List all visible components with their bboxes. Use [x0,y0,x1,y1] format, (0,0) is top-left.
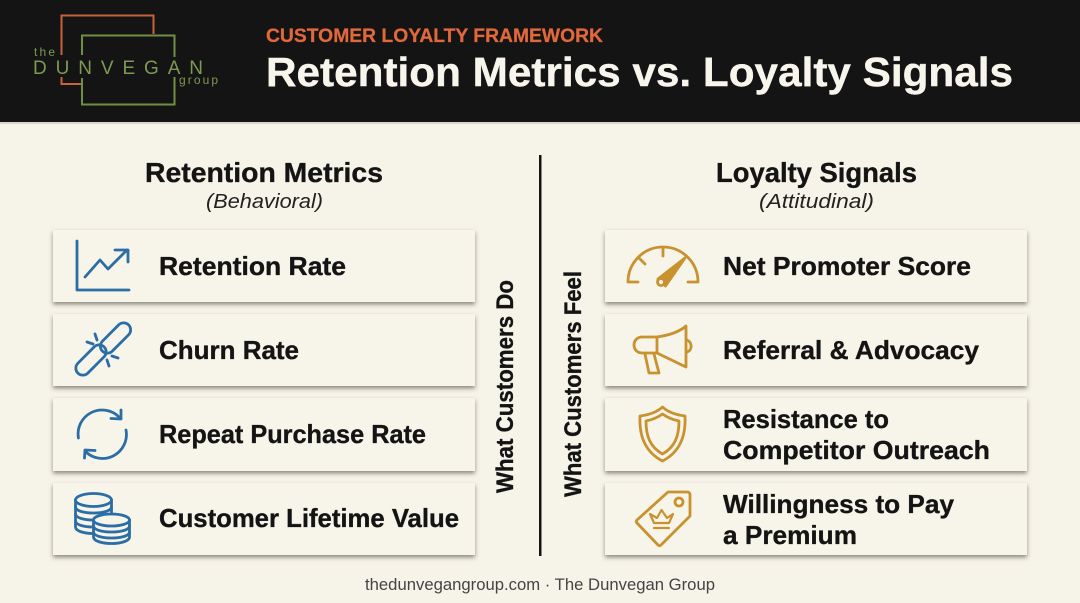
heading: Loyalty Signals: (Attitudinal) [759,191,874,213]
vertical label: What Customers Do: What Customers Do [492,280,519,493]
vertical label: What Customers Feel: What Customers Feel [560,271,587,497]
heading: Retention Metrics: Retention Metrics [145,157,383,188]
heading: Loyalty Signals [716,157,917,213]
eyebrow: CUSTOMER LOYALTY FRAMEWORK [266,26,603,47]
label: Retention Rate [159,251,346,281]
logo: The Dunvegan Group [33,16,218,104]
label: Referral & Advocacy [723,335,980,365]
card: Churn Rate [53,314,475,386]
card: Willingness to Pay a Premium [605,483,1027,555]
heading: Retention Metrics [145,157,383,213]
label: Churn Rate [159,335,299,365]
card: Repeat Purchase Rate [53,398,475,471]
title: Retention Metrics vs. Loyalty Signals [266,49,1013,95]
logo: The Dunvegan Group: DUNVEGAN [33,58,203,79]
icon: coin stacks [76,494,130,544]
label line 2: a Premium [723,520,857,550]
card: Customer Lifetime Value [53,483,475,555]
footer: thedunvegangroup.com · The Dunvegan Group [365,575,715,594]
logo: The Dunvegan Group: group [179,73,218,87]
heading: Retention Metrics: (Behavioral) [206,191,323,213]
heading: Loyalty Signals: Loyalty Signals [716,157,917,188]
label: Resistance to [723,404,889,434]
label line 2: Competitor Outreach [723,435,990,465]
icon: price tag with crown [636,492,690,546]
card: Resistance to Competitor Outreach [605,398,1027,471]
logo: The Dunvegan Group: the [34,45,55,59]
card: Retention Rate [53,230,475,302]
label: Willingness to Pay [723,489,955,519]
icon: shield [640,407,685,461]
header band [0,0,1080,124]
icon: gauge [628,247,698,286]
icon: refresh arrows [78,410,126,458]
label: Net Promoter Score [723,251,971,281]
icon: broken link [73,320,134,378]
icon: megaphone [634,326,691,373]
card: Referral & Advocacy [605,314,1027,386]
card: Net Promoter Score [605,230,1027,302]
label: Customer Lifetime Value [159,503,459,533]
icon: line chart [77,241,129,290]
center divider [539,155,542,556]
label: Repeat Purchase Rate [159,419,426,449]
